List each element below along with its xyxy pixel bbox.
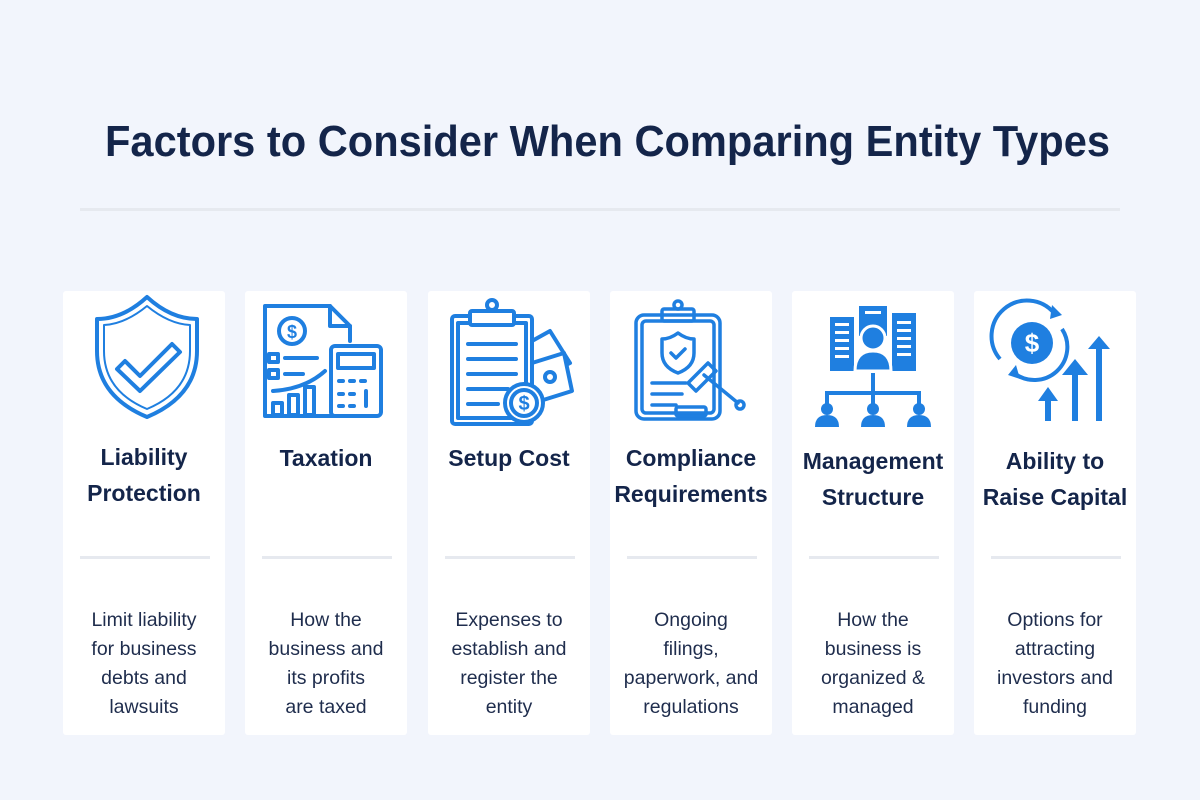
card title: Protection [87, 480, 201, 506]
card title [983, 448, 1127, 510]
card title: Ability to [1006, 448, 1104, 474]
icon: clipboard with money: $ [518, 393, 530, 415]
icon: dollar with arrows [990, 298, 1110, 421]
description [269, 609, 383, 718]
description [624, 609, 758, 718]
description: Expenses to [455, 609, 563, 631]
card title: Raise Capital [983, 484, 1127, 510]
description: establish and [452, 638, 566, 660]
description: are taxed [285, 696, 367, 718]
card title: Setup Cost [448, 445, 570, 471]
description [452, 609, 566, 718]
card title: Structure [822, 484, 924, 510]
card title: Compliance [626, 445, 756, 471]
description: Limit liability [91, 609, 197, 631]
card title: Liability [101, 444, 187, 470]
description: paperwork, and [624, 667, 758, 689]
description: debts and [101, 667, 187, 689]
icon: dollar with arrows: $ [1025, 328, 1040, 358]
description: attracting [1015, 638, 1095, 660]
panel: management structure [792, 291, 954, 735]
icon: clipboard with gavel [634, 299, 746, 421]
panel: taxation [245, 291, 407, 735]
card title: Requirements [614, 481, 768, 507]
description: regulations [643, 696, 739, 718]
icon: tax document calculator [263, 304, 383, 418]
panel: setup cost [428, 291, 590, 735]
description: funding [1023, 696, 1087, 718]
description: investors and [997, 667, 1113, 689]
title: Factors to Consider When Comparing Entity Types [105, 117, 1110, 166]
description: How the [837, 609, 909, 631]
panel: ability to raise capital [974, 291, 1136, 735]
description: for business [91, 638, 197, 660]
card title [803, 448, 943, 510]
card title: Management [803, 448, 943, 474]
card title [614, 445, 768, 507]
description: filings, [663, 638, 719, 660]
icon: tax document calculator: $ [287, 322, 297, 342]
icon: org chart [815, 306, 931, 427]
description: business and [269, 638, 383, 660]
description [997, 609, 1113, 718]
description: organized & [821, 667, 925, 689]
description: How the [290, 609, 362, 631]
card title [87, 444, 201, 506]
description: lawsuits [109, 696, 179, 718]
description [821, 609, 925, 718]
description: its profits [287, 667, 365, 689]
description: entity [486, 696, 532, 718]
icon: clipboard with money [450, 298, 574, 426]
card title: Taxation [280, 445, 372, 471]
description: register the [460, 667, 558, 689]
description: Options for [1007, 609, 1103, 631]
icon: shield [95, 294, 199, 419]
description: Ongoing [654, 609, 728, 631]
description: business is [825, 638, 921, 660]
panel: compliance requirements [610, 291, 772, 735]
panel: liability protection [63, 291, 225, 735]
description: managed [832, 696, 914, 718]
description [91, 609, 197, 718]
